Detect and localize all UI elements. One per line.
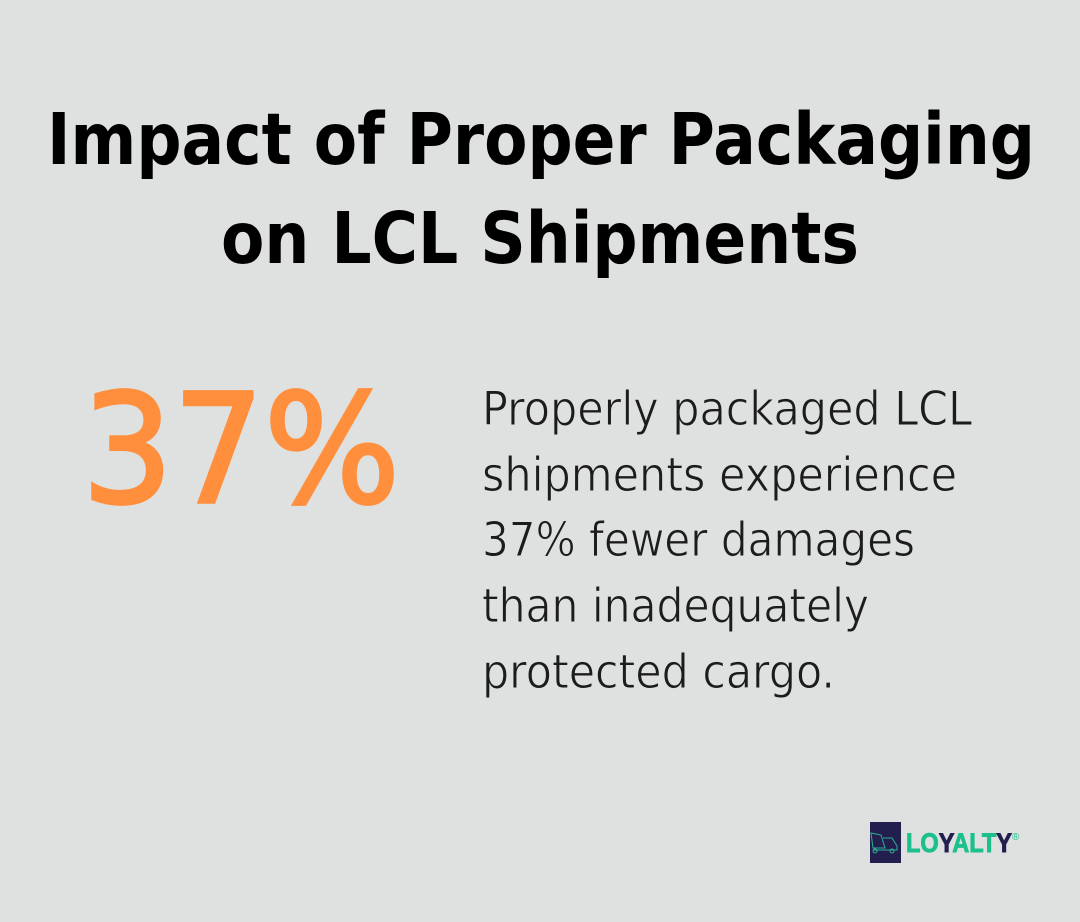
description text: 37% fewer damages bbox=[482, 513, 915, 568]
description text: than inadequately bbox=[482, 579, 869, 634]
registered mark: ® bbox=[1012, 832, 1020, 843]
description text: shipments experience bbox=[482, 448, 957, 503]
title: on LCL Shipments bbox=[221, 197, 859, 280]
description text bbox=[482, 382, 972, 700]
logo: Loyalty bbox=[870, 822, 1020, 863]
description text: protected cargo. bbox=[482, 645, 835, 700]
description text: Properly packaged LCL bbox=[482, 382, 972, 437]
title bbox=[47, 98, 1035, 280]
icon: truck badge bbox=[870, 822, 901, 863]
big statistic: 37%: 37% bbox=[82, 362, 400, 538]
logo wordmark: LOYALTY bbox=[906, 828, 1012, 858]
